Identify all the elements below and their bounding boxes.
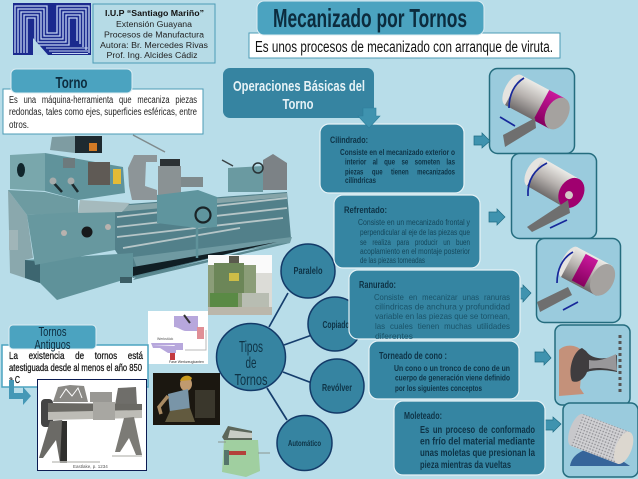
panel: refrentado: Refrentado: [344, 205, 387, 216]
subtitle box [249, 33, 560, 58]
heading: tornos antiguos [9, 324, 96, 352]
title: Mecanizado por Tornos [273, 3, 467, 33]
heading: torno [11, 69, 132, 93]
panel: ranurado: diferentes [375, 331, 413, 341]
panel: ranurado: Ranurado: [359, 280, 396, 291]
panel: torneado de cono [369, 341, 519, 399]
panel: refrentado: se realiza para producir un buen [360, 238, 470, 247]
engraving: antique lathe: Eastlake, p. 1234 [73, 464, 108, 469]
image panel: cilindrado [490, 68, 575, 154]
diagram: cutting scheme: Werkstück [157, 337, 174, 341]
panel: refrentado: perpendicular al eje de las piezas que [360, 228, 470, 237]
panel: cilindrado: cilíndricas [345, 176, 376, 185]
node: tipos de tornos [216, 324, 286, 390]
diagram: tipos de tornos connectors [267, 293, 312, 420]
diagram: cutting scheme: Fase Werkzeugkanten [169, 360, 204, 364]
engraving: antique lathe [38, 380, 146, 470]
node: tipos de tornos: Tornos [234, 372, 268, 389]
panel: torno description: otros. [9, 120, 29, 131]
lathe machine photo [8, 135, 292, 300]
node: copiado [308, 297, 362, 351]
node: tipos de tornos: de [246, 355, 257, 372]
panel: tornos antiguos text: a C [9, 374, 20, 386]
panel: ranurado: las cuales tienen muchas utilidades [375, 321, 510, 331]
panel: torneado de cono: por los siguientes conceptos [395, 383, 482, 393]
image panel: torneado de cono [555, 325, 630, 405]
photo: automatic lathe [218, 426, 270, 477]
panel: refrentado: acoplamiento en el montaje posterior [360, 247, 470, 256]
panel: moleteado [394, 401, 545, 475]
panel: torneado de cono: Un cono o un tronco de cono de un [394, 363, 510, 373]
panel: torneado de cono: cuerpo de generación viene definido [395, 372, 510, 382]
panel: cilindrado [320, 124, 464, 193]
heading: torno: Torno [56, 75, 88, 92]
panel: refrentado: de las piezas torneadas [360, 256, 425, 265]
heading: tornos antiguos: Tornos [38, 324, 67, 339]
panel: ranurado: cilíndricas de anchura y profundidad [375, 302, 510, 312]
panel: moleteado: en frío del material mediante [420, 436, 535, 448]
node: tipos de tornos: Tipos [239, 339, 263, 356]
panel: ranurado: variable en las piezas que se tornean, [375, 311, 510, 321]
panel: torneado de cono: Torneado de cono : [379, 351, 447, 362]
diagram: cutting scheme [148, 311, 208, 364]
institution info box: I.U.P “Santiago Mariño” [105, 9, 204, 18]
image panel: refrentado [512, 154, 596, 238]
photo: parallel lathe [208, 255, 272, 315]
institution info box: Prof. Ing. Alcides Cádiz [106, 51, 198, 60]
node: paralelo [281, 244, 335, 298]
panel: torno description [3, 89, 203, 134]
institution info box [93, 4, 215, 63]
panel: moleteado: pieza mientras da vueltas [420, 459, 511, 471]
arrow: cilindrado [474, 133, 490, 148]
panel: moleteado: Moleteado: [404, 411, 442, 422]
panel: moleteado: unas moletas que presionan la [420, 447, 535, 459]
image panel: moleteado [563, 403, 638, 477]
panel: tornos antiguos text: atestiguada desde al menos el año 850 [9, 362, 142, 374]
panel: cilindrado: interior al que se someten las [345, 158, 455, 166]
node: copiado: Copiado [322, 319, 350, 331]
panel: ranurado [349, 270, 520, 341]
arrow: moleteado [545, 417, 561, 432]
arrow: down to cilindrado [358, 108, 380, 128]
panel: cilindrado: Cilindrado: [330, 135, 368, 145]
panel: tornos antiguos text [2, 345, 148, 387]
panel: cilindrado: Consiste en el mecanizado exterior o [340, 148, 455, 157]
node: revolver: Revólver [322, 382, 352, 394]
institution info box: Extensión Guayana [116, 20, 193, 29]
arrow: refrentado [489, 209, 505, 225]
photo: worker at the lathe [153, 373, 220, 425]
institution info box: Autora: Br. Mercedes Rivas [100, 41, 208, 50]
node: automatico [277, 416, 332, 470]
arrow: torneado de cono [535, 349, 551, 365]
panel: tornos antiguos text: La existencia de tornos está [9, 350, 143, 362]
panel: ranurado: Consiste en mecanizar unas ranuras [374, 292, 510, 302]
panel: cilindrado: piezas que tienen mecanizados [345, 168, 455, 176]
node: automatico: Automático [288, 438, 321, 448]
node: paralelo: Paralelo [294, 266, 322, 277]
panel: torno description: Es una máquina-herramienta que mecaniza piezas [9, 95, 197, 106]
panel: torno description: redondas, tales como ejes, superficies esféricas, entre [9, 107, 197, 118]
arrow: bent blue arrow [9, 380, 31, 405]
panel: refrentado [334, 195, 480, 268]
heading: tornos antiguos: Antiguos [34, 337, 71, 352]
panel: moleteado: Es un proceso de conformado [420, 424, 535, 436]
node: revolver [310, 359, 364, 413]
panel: refrentado: Consiste en un mecanizado frontal y [358, 218, 470, 227]
heading: operaciones basicas [223, 68, 374, 118]
heading: operaciones basicas: Operaciones Básicas del [233, 78, 365, 95]
heading: operaciones basicas: Torno [282, 96, 314, 113]
arrow: ranurado [514, 285, 531, 302]
logo [13, 3, 91, 55]
title [257, 1, 484, 35]
image panel: ranurado [536, 238, 620, 322]
institution info box: Procesos de Manufactura [104, 30, 205, 40]
